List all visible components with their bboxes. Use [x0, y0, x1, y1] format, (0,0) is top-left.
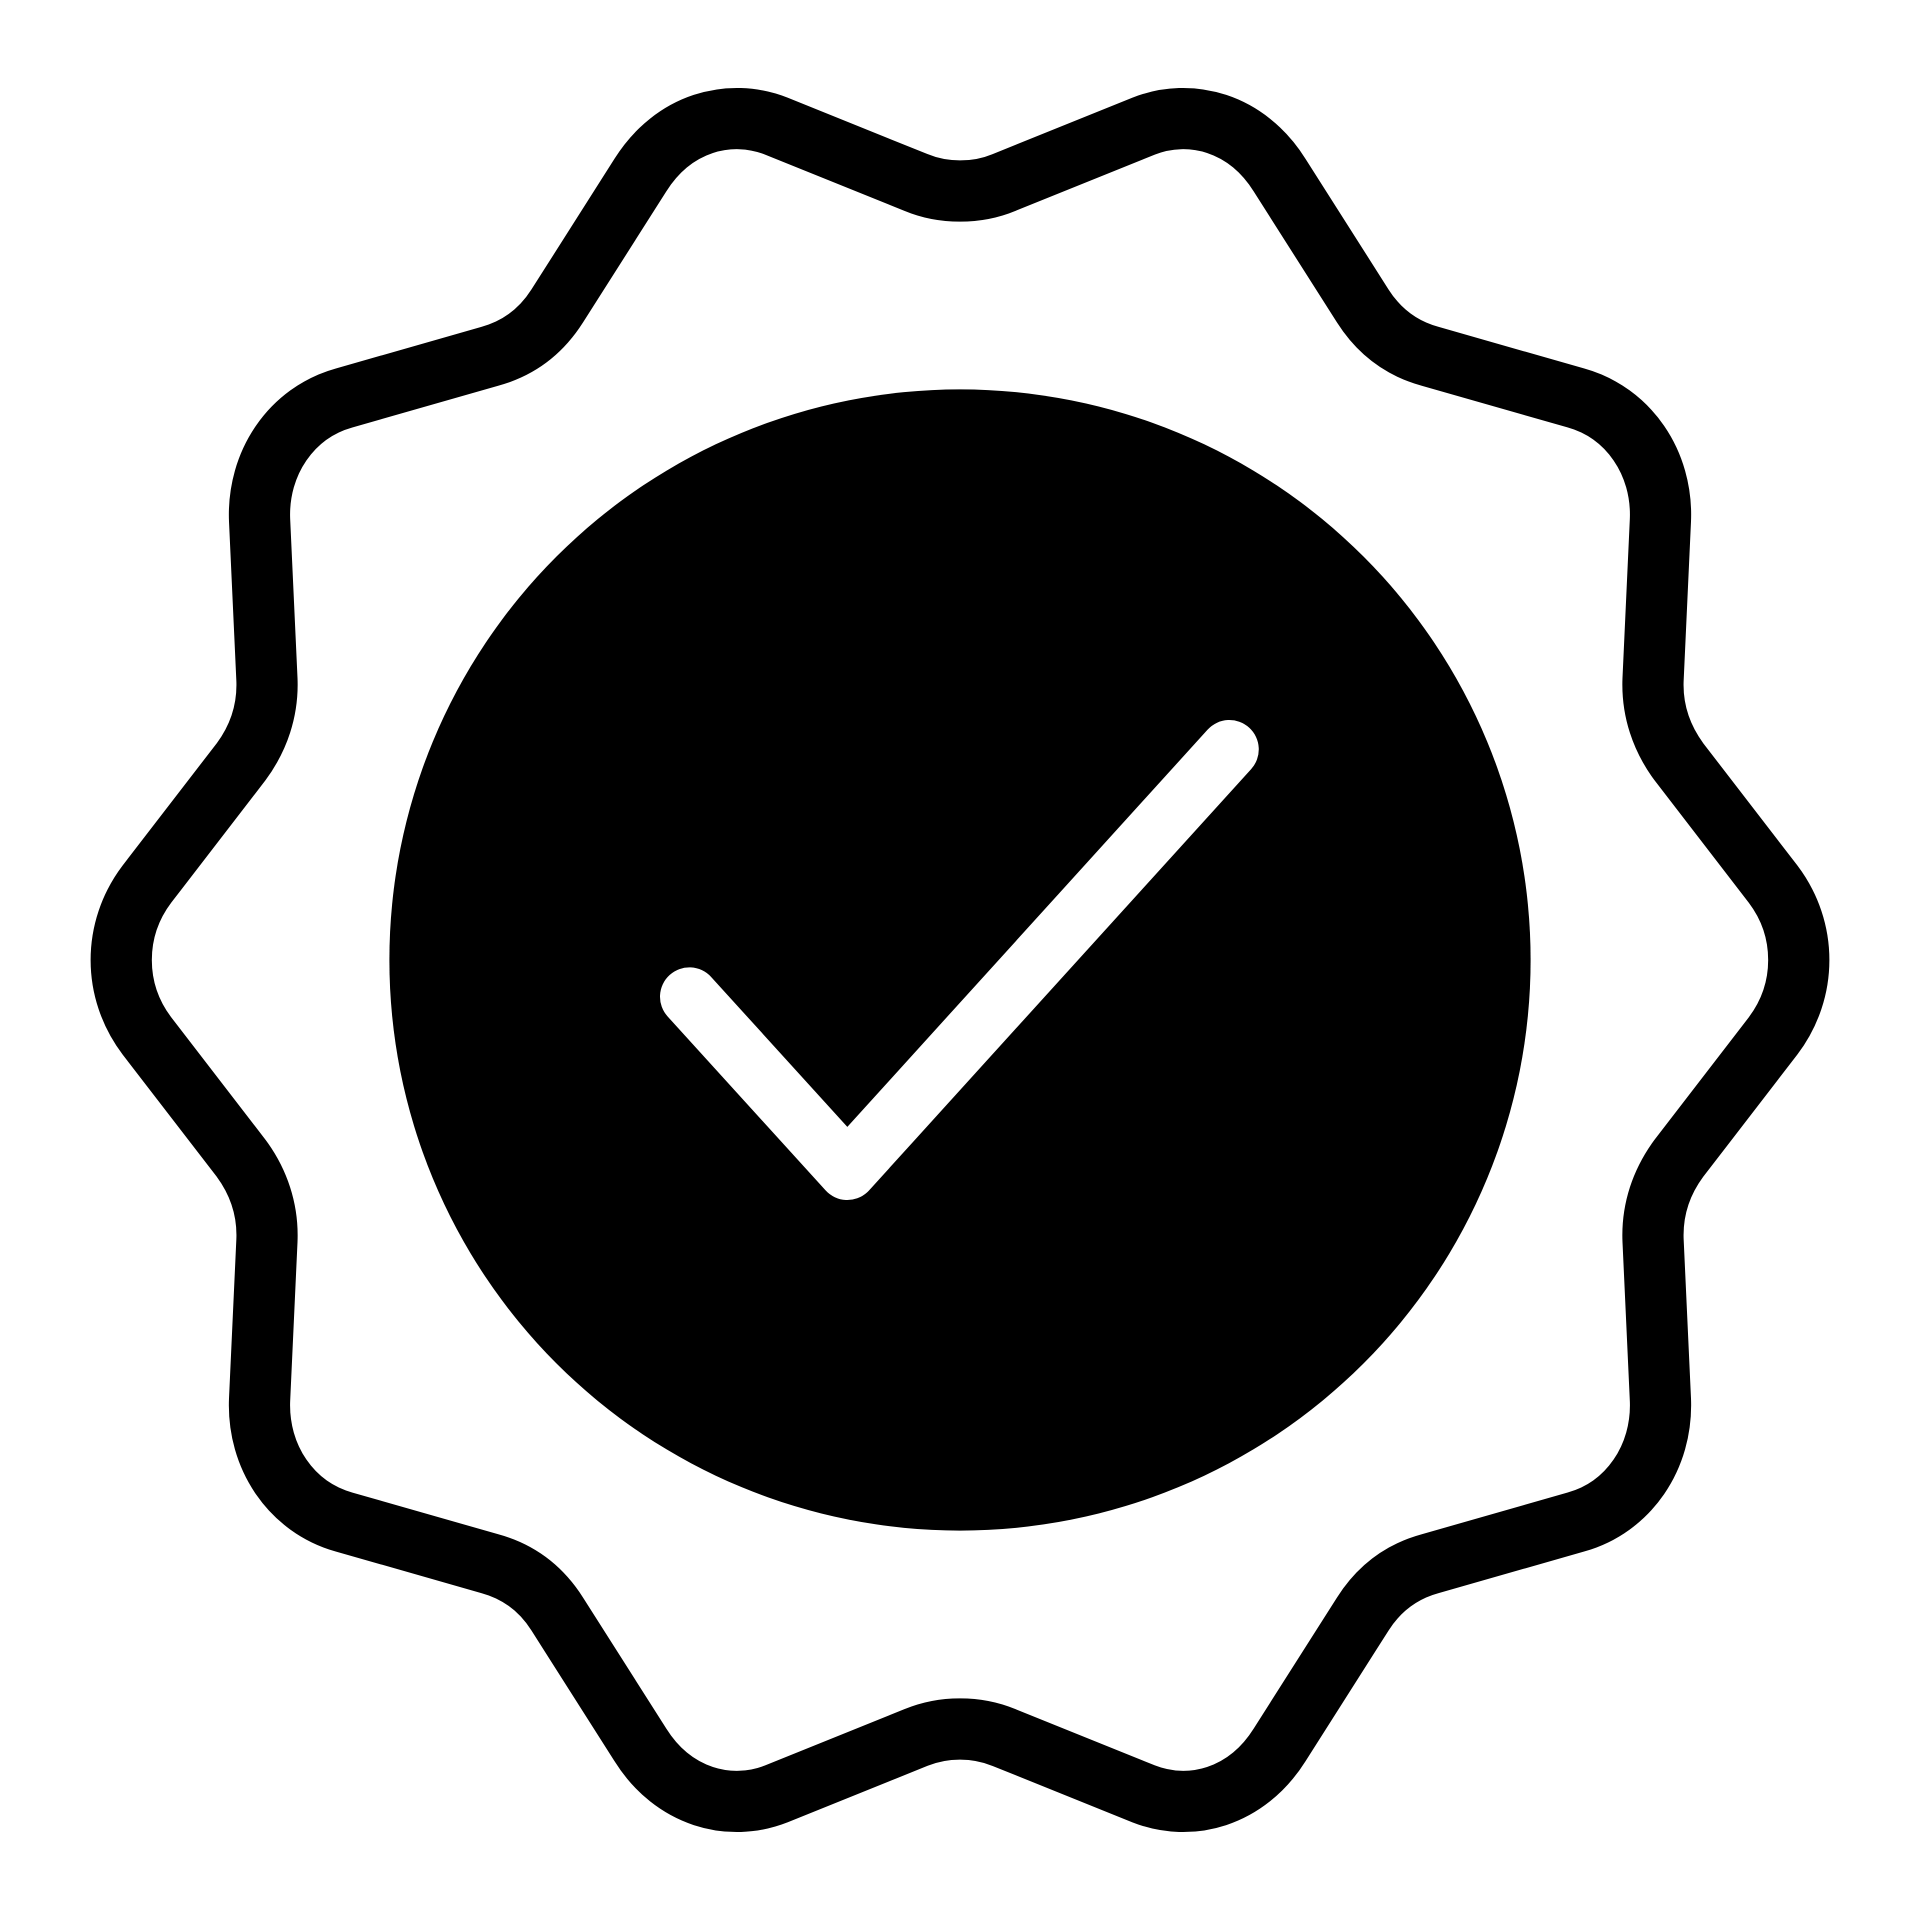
icon: white check mark — [689, 749, 1229, 1171]
icon: solid center circle — [389, 389, 1531, 1531]
icon: scalloped badge outline — [121, 119, 1799, 1801]
